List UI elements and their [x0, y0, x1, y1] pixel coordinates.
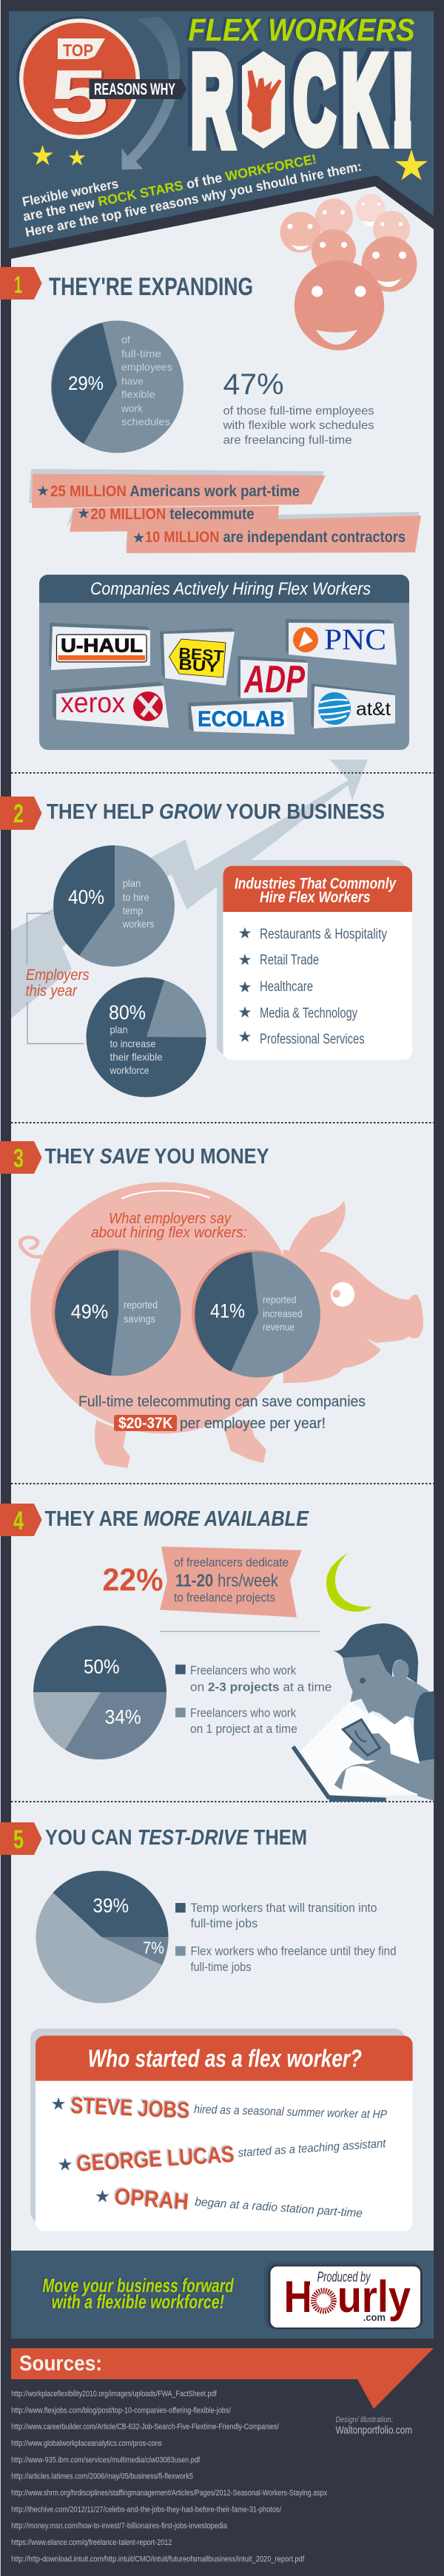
legend: transition: Flex workers who freelance until they find — [191, 1944, 397, 1958]
person: oprah: OPRAH — [113, 2183, 189, 2215]
legend: projects — [175, 1663, 332, 1736]
sources list: https://www.elance.com/q/freelance-talent-report-2012 — [11, 2538, 172, 2547]
title: rock: C — [289, 28, 331, 165]
person: steve jobs: STEVE JOBS — [70, 2092, 190, 2123]
label: reasons why: REASONS WHY — [94, 80, 175, 98]
person: oprah — [95, 2182, 363, 2220]
employers bracket — [25, 913, 90, 1044]
call to action: with a flexible workforce! — [52, 2291, 224, 2313]
design credit — [336, 2416, 412, 2437]
pie: 40%: temp — [123, 905, 143, 916]
flag: top: TOP — [63, 41, 93, 60]
pie: 49%: savings — [124, 1313, 155, 1325]
pie: 41% — [192, 1250, 320, 1377]
pie: 80%: to increase — [110, 1038, 156, 1049]
pie: transition — [36, 1871, 169, 2003]
pie: 80%: their flexible — [110, 1051, 163, 1063]
heading 1: THEY'RE EXPANDING — [49, 273, 253, 301]
section 3: save you money — [0, 1141, 423, 1468]
panel: who started as a flex worker — [30, 2029, 413, 2231]
logo: best buy: BEST — [178, 645, 224, 665]
logo: best buy — [160, 628, 235, 686]
ribbon: 22% freelancers: 11-20 hrs/week — [175, 1571, 279, 1591]
title: rock: ! — [386, 27, 411, 166]
callout: telecommuting savings — [78, 1394, 366, 1432]
pig caption: What employers say — [109, 1211, 232, 1227]
person: george lucas: started as a teaching assistant — [238, 2137, 386, 2160]
tab 4: 4 — [13, 1507, 24, 1535]
pig caption: about hiring flex workers: — [91, 1225, 247, 1241]
ribbon: millions — [29, 469, 421, 553]
person: george lucas: GEORGE LUCAS — [75, 2141, 235, 2177]
pie: 29%: 29% — [68, 372, 104, 394]
header panel — [9, 11, 434, 249]
pie: 41%: increased — [263, 1308, 303, 1319]
title: flex workers: FLEX WORKERS — [188, 13, 415, 48]
tab 5: 5 — [13, 1825, 24, 1854]
logo: hourly: Produced by — [317, 2270, 371, 2285]
ribbon: 22% freelancers — [102, 1546, 302, 1617]
person: oprah: OPRAH — [112, 2182, 189, 2214]
numeral 5: 5 — [50, 55, 109, 138]
pie: 40%: 40% — [68, 886, 104, 908]
pie: 80%: workforce — [110, 1064, 149, 1076]
title: rock: K — [342, 30, 385, 170]
pie: 29%: of — [121, 334, 130, 345]
person: george lucas: GEORGE LUCAS — [74, 2140, 234, 2175]
smiley faces — [280, 194, 417, 351]
panel: industries: Professional Services — [260, 1032, 365, 1047]
tab 2: 2 — [13, 799, 24, 828]
title: rock — [186, 25, 415, 172]
title: rock: R — [186, 25, 229, 169]
section 2: grow your business — [0, 797, 412, 1098]
sources list: http://www-935.ibm.com/services/multimedia/ciw03083usen.pdf — [11, 2455, 201, 2464]
heading 2: THEY HELP GROW YOUR BUSINESS — [47, 800, 385, 824]
pie: 80% — [86, 978, 206, 1098]
sources list: http://workplaceflexibility2010.org/images/uploads/FWA_FactSheet.pdf — [11, 2390, 218, 2398]
section 4: more available — [0, 1504, 434, 1802]
tab 3 — [0, 1141, 42, 1174]
sources list: http://money.msn.com/how-to-invest/7-billionaires-first-jobs-investopedia — [11, 2522, 228, 2531]
stat: 47% — [222, 368, 374, 447]
logo: u-haul — [49, 623, 150, 670]
tab 1 — [0, 267, 42, 300]
pie: 49%: 49% — [71, 1301, 108, 1323]
intro text: Flexible workers — [21, 176, 120, 209]
call to action: Move your business forward — [42, 2274, 235, 2296]
pie: 29%: schedules — [121, 416, 170, 427]
stat: 47%: are freelancing full-time — [223, 434, 352, 447]
tab 2 — [0, 797, 42, 830]
logo: adp — [238, 656, 308, 701]
sources list: http://articles.latimes.com/2006/may/05/business/fi-flexwork5 — [11, 2472, 193, 2481]
ribbon: millions: 25 MILLION Americans work part-time — [50, 483, 300, 500]
legend: projects: on 2-3 projects at a time — [190, 1680, 332, 1694]
title: rock: ! — [391, 31, 415, 170]
stat: 47%: 47% — [223, 368, 284, 401]
call to action — [41, 2274, 235, 2313]
sources list: http://www.careerbuilder.com/Article/CB-632-Job-Search-Five-Flextime-Friendly-Companies/ — [11, 2423, 280, 2432]
legend: projects: Freelancers who work — [190, 1663, 296, 1677]
ribbon: millions: 20 MILLION telecommute — [90, 506, 255, 523]
pie: 41%: reported — [263, 1294, 296, 1305]
panel: who started as a flex worker: Who started as a flex worker? — [88, 2044, 362, 2072]
logo: pnc — [286, 619, 397, 665]
employers bracket: this year — [25, 983, 78, 1000]
heading 3: THEY SAVE YOU MONEY — [44, 1145, 269, 1169]
pie: projects: 34% — [105, 1706, 141, 1728]
ribbon: 22% freelancers: to freelance projects — [174, 1591, 275, 1605]
sources list — [11, 2390, 327, 2563]
sources list: http://www.globalworkplaceanalytics.com/pros-cons — [11, 2439, 162, 2448]
icon: moon — [326, 1553, 372, 1612]
logo: hourly — [264, 2262, 423, 2330]
section 1: they're expanding — [0, 267, 421, 750]
sources list: http://http-download.intuit.com/http.intuit/CMO/intuit/futureofsmallbusiness/intuit_2020_report.pdf — [11, 2555, 305, 2563]
callout: telecommuting savings: per employee per year! — [180, 1416, 326, 1432]
badge: top 5 — [16, 16, 140, 139]
pie: 80%: 80% — [109, 1001, 146, 1024]
legend: transition — [175, 1901, 397, 1974]
logo: at&t — [311, 683, 395, 728]
call to action: with a flexible workforce! — [50, 2290, 223, 2312]
logo: hourly: Hourly — [284, 2272, 411, 2322]
pie: 49% — [52, 1248, 181, 1376]
illustration: piggy bank — [21, 1182, 423, 1468]
person: steve jobs: hired as a seasonal summer worker at HP — [194, 2103, 388, 2121]
pie: 41%: revenue — [263, 1321, 295, 1333]
panel: industries: Media & Technology — [260, 1006, 357, 1021]
pie: 40%: plan — [123, 877, 141, 889]
logo: adp: ADP — [243, 658, 305, 701]
footer band — [11, 2251, 434, 2339]
intro text: Here are the top five reasons why you should hire them: — [24, 159, 363, 240]
main light content panel — [11, 186, 434, 2251]
logo: best buy: BUY — [178, 656, 219, 676]
logo: xerox — [53, 682, 169, 728]
stars — [32, 145, 428, 180]
person: oprah: began at a radio station part-time — [195, 2196, 363, 2220]
sources banner: Sources: — [19, 2352, 102, 2376]
pie: transition: 7% — [143, 1938, 164, 1957]
logo: pnc: PNC — [324, 623, 386, 656]
pie: 41%: 41% — [210, 1300, 245, 1322]
pie: projects — [33, 1626, 166, 1759]
pie: 40%: workers — [122, 918, 154, 930]
header background — [9, 11, 434, 249]
panel: industries: Hire Flex Workers — [260, 889, 370, 906]
title: rock: C — [294, 32, 335, 169]
ribbon: millions: 10 MILLION are independant contractors — [145, 529, 406, 546]
pie: 29%: have — [121, 375, 144, 387]
callout: telecommuting savings: Full-time telecommuting can save companies — [78, 1394, 366, 1410]
design credit: Design/ Illustration: — [336, 2416, 393, 2424]
numeral 5 — [50, 55, 111, 138]
illustration: man with phone and laptop — [293, 1623, 434, 1802]
pie: 40% — [53, 845, 175, 967]
label: reasons why — [89, 79, 186, 99]
legend: projects: on 1 project at a time — [190, 1722, 297, 1736]
panel: industries: Retail Trade — [260, 953, 319, 968]
pie: transition: 39% — [93, 1895, 129, 1917]
logo: ecolab — [188, 699, 295, 734]
sources banner — [11, 2348, 434, 2409]
panel: companies: Companies Actively Hiring Flex Workers — [90, 579, 371, 599]
legend: transition: full-time jobs — [191, 1916, 258, 1930]
logo: u-haul: U-HAUL — [61, 635, 143, 657]
heading 5: YOU CAN TEST-DRIVE THEM — [45, 1826, 307, 1850]
title: flex workers: FLEX WORKERS — [186, 11, 412, 47]
pie: 29% — [51, 321, 184, 453]
panel: industries: Restaurants & Hospitality — [260, 927, 387, 942]
section 5: test-drive them — [0, 1822, 413, 2231]
title: rock: K — [337, 27, 380, 166]
heading 4: THEY ARE MORE AVAILABLE — [44, 1507, 309, 1531]
logo: hourly: .com — [363, 2311, 386, 2323]
icon: rock hand — [247, 70, 282, 132]
person: steve jobs — [52, 2091, 388, 2123]
sources list: http://thechive.com/2012/11/27/celebs-and-the-jobs-they-had-before-their-fame-31-photos/ — [11, 2505, 282, 2514]
panel: companies — [39, 575, 409, 750]
stat: 47%: of those full-time employees — [223, 405, 374, 417]
legend: transition: Temp workers that will transition into — [191, 1901, 377, 1915]
person: george lucas — [58, 2137, 386, 2177]
intro text: are the new ROCK STARS of the WORKFORCE! — [21, 152, 317, 224]
ribbon: 22% freelancers: 22% — [102, 1563, 163, 1598]
person: steve jobs: STEVE JOBS — [69, 2091, 189, 2122]
panel: industries — [217, 860, 412, 1060]
pie: 29%: flexible — [121, 388, 155, 400]
numeral 5: 5 — [52, 55, 111, 138]
panel: industries: Industries That Commonly — [235, 876, 397, 893]
design credit: Waltonportfolio.com — [336, 2424, 412, 2437]
callout: telecommuting savings: $20-37K — [118, 1415, 173, 1432]
pie: 29%: employees — [121, 361, 172, 373]
call to action: Move your business forward — [41, 2274, 233, 2296]
panel: industries: Healthcare — [260, 979, 313, 995]
logo: at&t: at&t — [356, 699, 391, 720]
pig caption — [91, 1211, 247, 1241]
legend: projects: Freelancers who work — [190, 1706, 296, 1720]
pie: projects: 50% — [84, 1656, 120, 1678]
sources list: http://www.flexjobs.com/blog/post/top-10-companies-offering-flexible-jobs/ — [11, 2406, 232, 2415]
logo: xerox: xerox — [61, 688, 125, 719]
pie: 49%: reported — [124, 1299, 158, 1311]
pie: 29%: work — [121, 402, 144, 414]
sources list: http://www.shrm.org/hrdisciplines/staffingmanagement/Articles/Pages/2012-Seasonal-Workers-Staying.aspx — [11, 2489, 327, 2498]
stat: 47%: with flexible work schedules — [222, 419, 374, 432]
curved arrow — [122, 16, 180, 169]
tab 3: 3 — [13, 1144, 24, 1173]
tab 4 — [0, 1504, 42, 1536]
growth arrow — [11, 760, 368, 1018]
legend: transition: full-time jobs — [191, 1960, 252, 1974]
logo: ecolab: ECOLAB — [198, 707, 285, 731]
tab 1: 1 — [14, 271, 22, 298]
flag: top — [58, 38, 105, 60]
title: rock: R — [191, 29, 234, 172]
pie: 29%: full-time — [121, 348, 161, 359]
pie: 40%: to hire — [123, 891, 149, 903]
employers bracket: Employers — [26, 967, 90, 984]
ribbon: 22% freelancers: of freelancers dedicate — [174, 1555, 289, 1569]
tab 5 — [0, 1822, 42, 1855]
pie: 80%: plan — [110, 1024, 127, 1035]
